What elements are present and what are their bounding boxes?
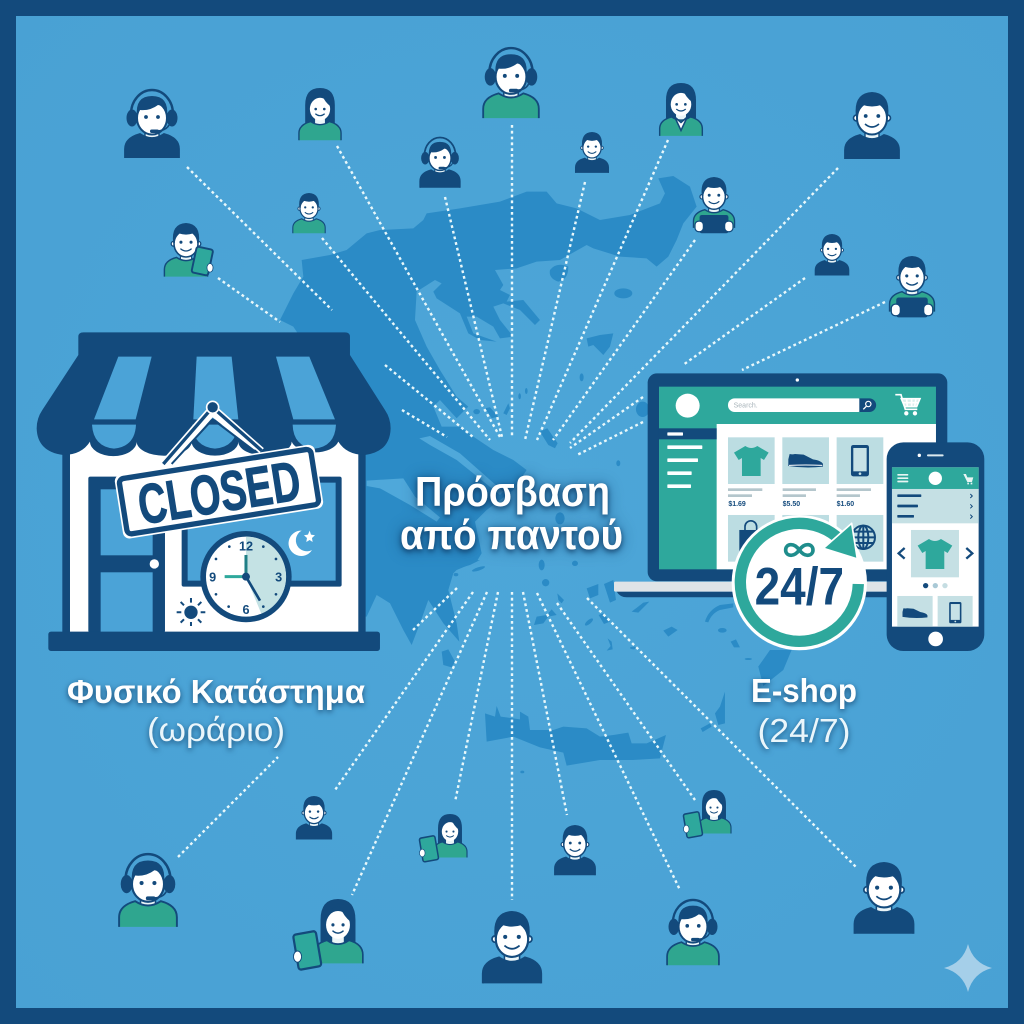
- sign hanger: [163, 401, 262, 464]
- person: woman teal: [299, 88, 341, 140]
- person: man navy top-right: [845, 92, 899, 159]
- person: man navy small: [576, 132, 608, 173]
- phone product: [911, 530, 959, 577]
- heading: από παντού: [400, 511, 623, 558]
- icon: sun: [177, 598, 205, 626]
- sidebar menu: [667, 432, 702, 488]
- connection lines: [178, 125, 885, 900]
- product tiles: [728, 437, 883, 562]
- person: headset teal top centre: [483, 48, 539, 118]
- icon: shopping bag: [739, 521, 757, 553]
- icon: shoe: [788, 454, 823, 468]
- person: man navy bottom centre: [483, 911, 541, 983]
- prices: $5.50: [783, 501, 800, 508]
- laptop: [648, 373, 947, 581]
- price lines: [728, 488, 871, 497]
- person: woman teal with collar: [660, 83, 702, 136]
- clock: [200, 531, 292, 622]
- prices: [728, 501, 854, 508]
- person: man with phone: [164, 223, 213, 277]
- site logo: [676, 394, 700, 418]
- heading: Πρόσβαση: [415, 468, 610, 515]
- map of Greece: [280, 176, 792, 773]
- person: woman with phone bottom: [293, 899, 363, 970]
- heading: [400, 468, 623, 558]
- icon: shirt: [734, 446, 769, 476]
- store label: Φυσικό Κατάστημα: [67, 673, 365, 710]
- awning: [37, 332, 391, 456]
- laptop base: [614, 582, 944, 597]
- search bar: Search.: [734, 403, 758, 410]
- e-shop label: [751, 672, 857, 749]
- phone header: [897, 472, 973, 485]
- person: man teal small: [293, 193, 325, 233]
- person: man with tablet right: [890, 256, 934, 317]
- sign board: [114, 444, 324, 539]
- 24/7 badge: [732, 515, 867, 650]
- sparkle: [944, 944, 992, 992]
- 24/7 badge: 24/7: [755, 557, 844, 616]
- icon: globe: [852, 526, 875, 549]
- prices: $1.69: [728, 501, 746, 508]
- icon: cart: [895, 395, 920, 415]
- e-shop label: (24/7): [758, 712, 850, 749]
- search bar: [728, 398, 876, 412]
- store base: [48, 632, 380, 651]
- sign board: CLOSED: [134, 449, 305, 536]
- person: headset navy small: [420, 137, 460, 188]
- devices: [614, 373, 984, 651]
- physical store: [37, 332, 391, 651]
- person: woman with phone right: [683, 790, 731, 838]
- phone menu: [897, 494, 921, 518]
- person: man navy bottom-right: [855, 862, 913, 934]
- gulfs and straits: [367, 436, 503, 522]
- person: woman with phone small: [419, 814, 467, 862]
- clock: 3: [275, 571, 282, 585]
- clock: 6: [242, 603, 250, 617]
- person: man with tablet: [693, 177, 735, 233]
- clock: 12: [239, 540, 253, 554]
- icon: infinity: [786, 545, 813, 555]
- store door: [88, 477, 165, 633]
- person: headset navy top-left: [125, 90, 179, 158]
- store label: (ωράριο): [147, 711, 285, 748]
- e-shop label: E-shop: [751, 672, 857, 709]
- person: man navy small bottom right: [555, 825, 595, 875]
- closed sign: [114, 401, 324, 539]
- clock: 9: [209, 571, 216, 585]
- store label: [67, 673, 365, 748]
- store window: [182, 477, 342, 587]
- prices: $1.60: [837, 501, 854, 508]
- person: headset teal bottom-left: [119, 854, 177, 927]
- phone product tiles: [897, 596, 973, 627]
- person: man navy small bottom: [296, 796, 332, 840]
- person: man navy small right: [815, 234, 849, 276]
- icon: phone: [851, 445, 869, 476]
- smartphone: [887, 442, 984, 651]
- person: headset teal bottom right: [667, 900, 719, 965]
- carousel dots: [923, 583, 948, 588]
- icon: moon and star: [289, 531, 315, 556]
- store walls: [62, 433, 366, 633]
